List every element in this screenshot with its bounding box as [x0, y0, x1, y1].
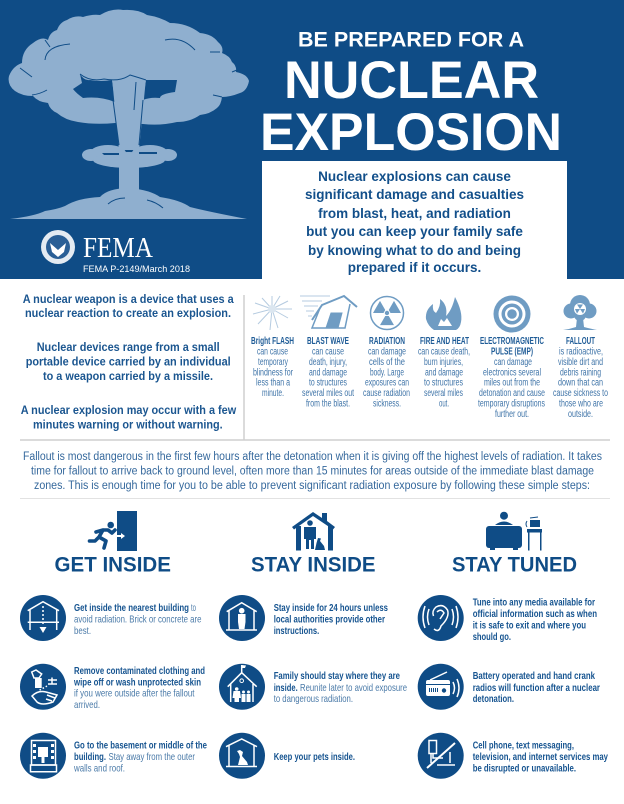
effect: fire and heat: burn injuries,: [424, 357, 463, 368]
effect: bright flash: can cause: [257, 346, 288, 358]
step: services disrupted: [418, 733, 608, 779]
panel: intro box: prepared if it occurs.: [348, 260, 481, 275]
effect: fallout: FALLOUT: [566, 336, 595, 347]
step: keep pets inside: Keep your pets inside.: [274, 751, 355, 763]
effect: fire and heat: several miles: [424, 388, 463, 399]
text block: nuclear definitions: minutes warning or without warning.: [33, 419, 223, 431]
effect: bright flash: Bright FLASH: [251, 336, 294, 347]
effect: blast wave: can cause: [312, 346, 344, 358]
effect: blast wave: death, injury,: [309, 357, 347, 368]
effect: bright flash: temporary: [258, 357, 288, 368]
effect: radiation: sickness.: [373, 398, 401, 410]
effect: fallout: visible dirt and: [558, 357, 603, 368]
icon: crossed-out phone and laptop: [418, 733, 464, 779]
step: nearest building: Get inside the nearest building: [74, 602, 189, 614]
step: remove clothing: [20, 664, 205, 711]
text block: nuclear definitions: portable device carried by an individual: [26, 357, 231, 369]
effect: fire and heat: [418, 297, 470, 410]
step: stay 24 hours: Stay inside for 24 hours unless: [274, 602, 388, 614]
step: remove clothing: Remove contaminated clothing and: [74, 665, 205, 677]
step: services disrupted: Cell phone, text messaging,: [473, 740, 574, 752]
text block: nuclear definitions: to a weapon carried by a missile.: [43, 371, 213, 383]
step: stay 24 hours: [219, 595, 388, 641]
effect: fallout: those who are: [559, 398, 603, 410]
icon: washing hands: [20, 664, 66, 710]
effect: fallout: outside.: [568, 409, 593, 420]
step: family stays: [219, 664, 407, 710]
panel: header banner: [0, 0, 624, 279]
icon: fallout cloud: [563, 295, 597, 330]
effect: radiation: exposures can: [365, 378, 409, 389]
title: EXPLOSION: [260, 103, 562, 162]
step: basement: [20, 733, 207, 779]
illustration: mushroom cloud: [9, 10, 249, 219]
text block: fallout explanation: [23, 451, 602, 492]
icon: blast wave house: [300, 296, 357, 328]
step: services disrupted: be disrupted or unavailable.: [473, 762, 576, 774]
icon: person listening to radio: [486, 512, 542, 550]
step: remove clothing: wipe off or wash unprotected skin: [73, 676, 201, 688]
text block: nuclear definitions: Nuclear devices range from a small: [37, 342, 220, 354]
effect: electromagnetic pulse: temporary disruptions: [478, 398, 545, 410]
effect: electromagnetic pulse: [478, 296, 545, 420]
icon: concentric rings: [494, 296, 530, 332]
step: tune into media: [418, 595, 597, 643]
effect: fallout: is radioactive,: [559, 346, 603, 358]
column heading: stay inside: [251, 512, 376, 576]
icon: building cross-section: [20, 733, 66, 779]
logo: FEMA: [41, 230, 190, 275]
icon: flash: [253, 296, 292, 330]
effect: electromagnetic pulse: detonation and cause: [479, 388, 545, 399]
effect: bright flash: minute.: [262, 388, 284, 399]
column heading: stay tuned: STAY TUNED: [452, 554, 577, 576]
effect: bright flash: blindness for: [253, 367, 293, 378]
effect: radiation: cells of the: [369, 357, 405, 368]
icon: person in house: [219, 595, 265, 641]
effect: fallout: debris raining: [560, 367, 601, 378]
effect: fire and heat: out.: [439, 398, 449, 410]
effect: blast wave: and damage: [309, 367, 347, 378]
title: BE PREPARED FOR A: [298, 29, 524, 52]
panel: intro box: significant damage and casualties: [305, 187, 524, 202]
panel: intro box: from blast, heat, and radiation: [318, 206, 511, 221]
effect: blast wave: several miles out: [302, 388, 354, 399]
step: battery radios: detonation.: [473, 693, 514, 705]
step: nearest building: to: [191, 602, 196, 614]
effect: blast wave: [300, 296, 357, 410]
step: keep pets inside: [219, 733, 355, 779]
text block: nuclear definitions: A nuclear weapon is a device that uses a: [23, 294, 234, 306]
effect: fire and heat: to structures: [424, 378, 463, 389]
title: [260, 29, 562, 162]
effect: radiation: [363, 296, 410, 410]
step: family stays: to dangerous radiation.: [274, 693, 353, 705]
step: battery radios: [418, 664, 600, 710]
step: family stays: inside.: [274, 682, 298, 694]
icon: family in house with flag: [219, 664, 265, 710]
icon: flames: [426, 297, 461, 330]
text block: fallout explanation: zones. This is enough time for you to be able to prevent significant radiation exposure by following these simple steps:: [34, 480, 590, 492]
step: remove clothing: arrived.: [74, 699, 100, 711]
icon: radiation trefoil: [370, 296, 404, 330]
effect: fire and heat: and damage: [425, 367, 463, 378]
step: stay 24 hours: instructions.: [274, 625, 319, 637]
column heading: get inside: [54, 511, 171, 576]
icon: radio: [418, 664, 464, 710]
effect: blast wave: to structures: [309, 378, 347, 389]
step: tune into media: it is safe to exit and where you: [473, 619, 586, 631]
effect: electromagnetic pulse: electronics several: [483, 367, 541, 378]
step: basement: walls and roof.: [73, 762, 125, 774]
effect: bright flash: less than a: [256, 378, 290, 389]
step: basement: Go to the basement or middle of the: [74, 740, 207, 752]
logo: FEMA: FEMA P-2149/March 2018: [83, 264, 190, 275]
logo: FEMA: FEMA: [83, 233, 154, 264]
step: basement: building.: [74, 751, 106, 763]
icon: building with down arrow: [20, 595, 66, 641]
step: remove clothing: if you were outside after the fallout: [74, 688, 195, 700]
text block: nuclear definitions: A nuclear explosion may occur with a few: [21, 405, 236, 417]
column heading: stay tuned: [452, 512, 577, 576]
effect: fire and heat: can cause death,: [418, 346, 470, 358]
title: NUCLEAR: [284, 51, 539, 110]
panel: intro box: by knowing what to do and being: [308, 243, 521, 258]
text block: nuclear definitions: [21, 294, 236, 431]
icon: dog in house: [219, 733, 265, 779]
effect: electromagnetic pulse: ELECTROMAGNETIC: [480, 336, 544, 347]
effect: radiation: can damage: [368, 346, 406, 358]
panel: intro box: Nuclear explosions can cause: [318, 169, 511, 184]
step: nearest building: avoid radiation. Brick or concrete are: [74, 614, 202, 626]
effect: electromagnetic pulse: can damage: [494, 357, 532, 368]
effect: radiation: body. Large: [370, 367, 404, 378]
step: stay 24 hours: local authorities provide other: [274, 614, 385, 626]
icon: ear with sound waves: [418, 595, 464, 641]
effect: radiation: RADIATION: [369, 336, 405, 347]
step: family stays: Family should stay where they are: [274, 670, 400, 682]
effect: blast wave: BLAST WAVE: [307, 336, 349, 347]
icon: person and dog in house: [292, 512, 335, 550]
effect: fallout: [553, 295, 608, 420]
effect: electromagnetic pulse: PULSE (EMP): [491, 346, 533, 358]
effect: fallout: down that can: [558, 378, 603, 389]
effect: radiation: cause radiation: [363, 388, 410, 399]
step: basement: Stay away from the outer: [108, 751, 195, 763]
icon: person running through door: [90, 511, 137, 551]
effect: bright flash: [251, 296, 294, 399]
panel: intro box: but you can keep your family safe: [306, 224, 523, 239]
column heading: get inside: GET INSIDE: [54, 554, 171, 576]
step: tune into media: should go.: [473, 631, 511, 643]
effect: fire and heat: FIRE AND HEAT: [420, 336, 469, 347]
effect: blast wave: from the blast.: [306, 398, 350, 410]
effect: electromagnetic pulse: miles out from the: [484, 378, 540, 389]
text block: nuclear definitions: nuclear reaction to create an explosion.: [25, 308, 231, 320]
step: nearest building: best.: [74, 625, 91, 637]
effect: electromagnetic pulse: further out.: [495, 409, 529, 420]
step: family stays: Reunite later to avoid exposure: [300, 682, 407, 694]
step: nearest building: [20, 595, 202, 641]
panel: intro box: [262, 161, 567, 279]
column heading: stay inside: STAY INSIDE: [251, 554, 376, 576]
